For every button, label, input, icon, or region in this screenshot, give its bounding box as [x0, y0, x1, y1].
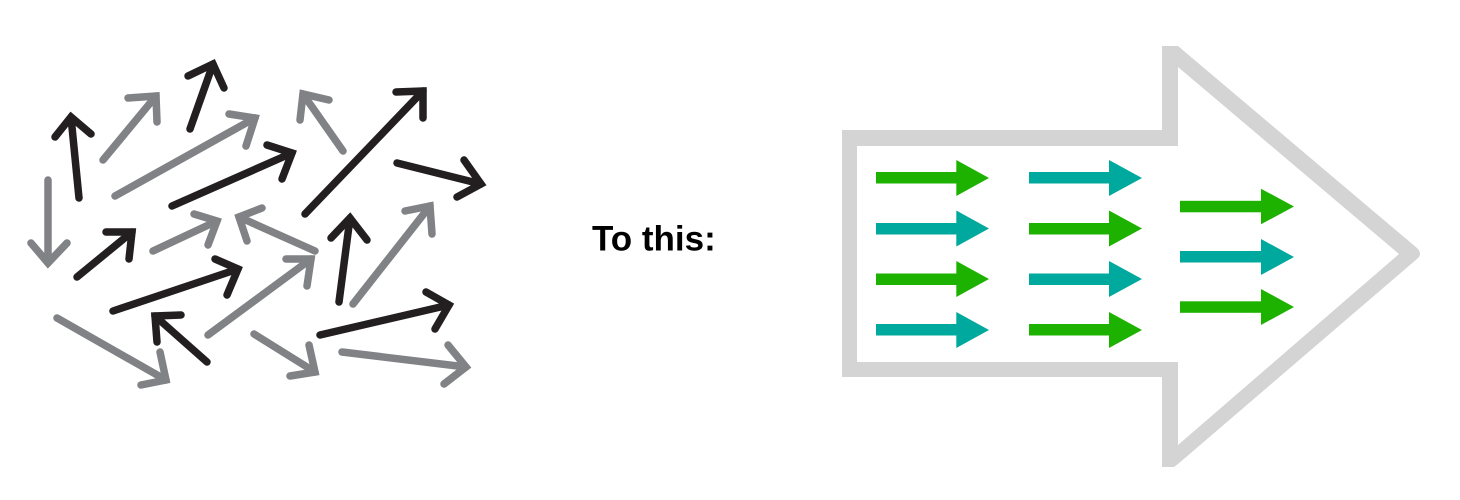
small arrows group [876, 160, 1294, 348]
arrow column 1 [876, 160, 989, 348]
arrow: gray lower right [342, 345, 466, 384]
arrow: dark right [397, 160, 481, 197]
arrow column 3 [1180, 189, 1294, 325]
arrow: gray down [31, 180, 67, 263]
arrow: dark lower right [320, 292, 449, 335]
arrow: dark up-left short [155, 315, 207, 362]
arrow: gray short lower [254, 334, 315, 376]
arrow: gray up-right center [353, 206, 432, 304]
arrow: dark up-left [55, 117, 91, 198]
arrow: gray lower-left long [57, 318, 166, 385]
label: To this: To this: [592, 220, 716, 258]
cluster: chaotic arrows [31, 64, 481, 385]
large outlined arrow [842, 46, 1420, 467]
arrow: gray short [153, 214, 217, 251]
arrow column 2 [1029, 160, 1142, 348]
arrow: gray up-right [103, 96, 157, 160]
arrow: gray center [208, 259, 311, 335]
arrow: dark short [77, 232, 132, 277]
arrow: dark long up-right [305, 91, 423, 214]
arrow: gray left [239, 208, 315, 251]
arrow: gray up-left [300, 94, 343, 151]
arrow: dark up center [331, 218, 367, 302]
arrow: gray long [115, 114, 255, 196]
arrow: dark middle long [172, 145, 292, 206]
arrow: dark lower left [113, 259, 238, 311]
arrow: dark up [188, 64, 224, 129]
